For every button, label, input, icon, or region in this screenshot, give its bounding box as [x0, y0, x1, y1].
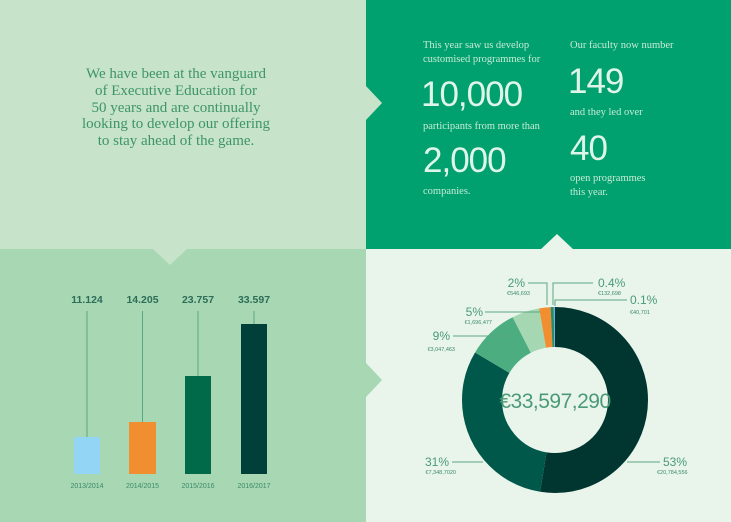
bar 2015/2016: 23.757 — [182, 294, 214, 306]
label: 31%: €7,348,7020 — [425, 470, 456, 476]
label: 2% — [507, 276, 530, 297]
text: faculty: Our faculty now number — [570, 40, 674, 51]
number: 2,000: 2,000 — [423, 141, 506, 180]
bar 2013/2014: 2013/2014 — [70, 483, 104, 490]
bar 2016/2017: 33.597 — [238, 294, 270, 306]
stats column 2 — [568, 40, 674, 198]
label: 0.1%: €40,701 — [630, 310, 650, 316]
label: 31%: 31% — [425, 455, 449, 469]
text: develop: customised programmes for — [423, 54, 540, 64]
label: 5% — [464, 305, 492, 326]
donut chart — [425, 276, 688, 493]
bar 2013/2014 — [70, 294, 104, 490]
label: 53%: 53% — [663, 455, 687, 469]
label: 0.4%: €132,698 — [598, 291, 621, 297]
arrow: intro to stats — [366, 86, 382, 120]
label: 9% — [427, 329, 455, 353]
label: 5%: €1,696,477 — [464, 320, 492, 326]
text: participants: participants from more than — [423, 121, 540, 132]
text: led over: and they led over — [570, 107, 643, 118]
intro text: 50 years and are continually — [91, 100, 261, 116]
label: 0.4% — [598, 276, 626, 297]
intro text — [82, 66, 270, 149]
arrow: intro down — [153, 249, 187, 265]
bar 2014/2015: 14.205 — [126, 294, 159, 306]
bar 2015/2016: 2015/2016 — [181, 483, 215, 490]
panel: donut — [366, 249, 731, 522]
label: 9%: €3,047,463 — [427, 347, 455, 353]
bar 2014/2015 — [126, 294, 159, 490]
intro text: to stay ahead of the game. — [98, 133, 254, 149]
bar 2016/2017: 2016/2017 — [237, 483, 271, 490]
text: develop — [423, 40, 540, 64]
bar chart — [70, 294, 271, 490]
bar 2013/2014: 11.124 — [71, 294, 103, 306]
label: 53%: €20,784,556 — [657, 470, 688, 476]
stats column 1 — [421, 40, 540, 197]
bar 2014/2015: 2014/2015 — [126, 483, 159, 490]
intro text: We have been at the vanguard — [86, 66, 266, 82]
text: develop: This year saw us develop — [423, 40, 529, 51]
intro text: looking to develop our offering — [82, 116, 270, 132]
label: 0.1%: 0.1% — [630, 293, 658, 307]
panel: stats — [366, 0, 731, 249]
text: companies: companies. — [423, 186, 471, 197]
label: 5%: 5% — [466, 305, 483, 319]
number: 10,000: 10,000 — [421, 75, 522, 114]
bar 2016/2017 — [237, 294, 271, 490]
donut total: €33,597,290 — [499, 390, 611, 413]
label: 2%: €546,693 — [507, 291, 530, 297]
text: open programmes: open programmes — [570, 173, 646, 184]
label: 0.4%: 0.4% — [598, 276, 626, 290]
label: 31% — [425, 455, 456, 476]
text: open programmes — [570, 173, 646, 198]
text: open programmes: this year. — [570, 186, 608, 198]
arrow: bars to donut — [366, 363, 382, 397]
panel: intro — [0, 0, 366, 249]
intro text: of Executive Education for — [95, 83, 257, 99]
number: 40: 40 — [570, 129, 607, 168]
label: 9%: 9% — [433, 329, 450, 343]
number: 149: 149 — [568, 62, 623, 101]
panel: bar chart — [0, 249, 366, 522]
label: 2%: 2% — [508, 276, 525, 290]
arrow: donut up — [541, 234, 573, 249]
label: 0.1% — [630, 293, 658, 316]
label: 53% — [657, 455, 688, 476]
bar 2015/2016 — [181, 294, 215, 490]
